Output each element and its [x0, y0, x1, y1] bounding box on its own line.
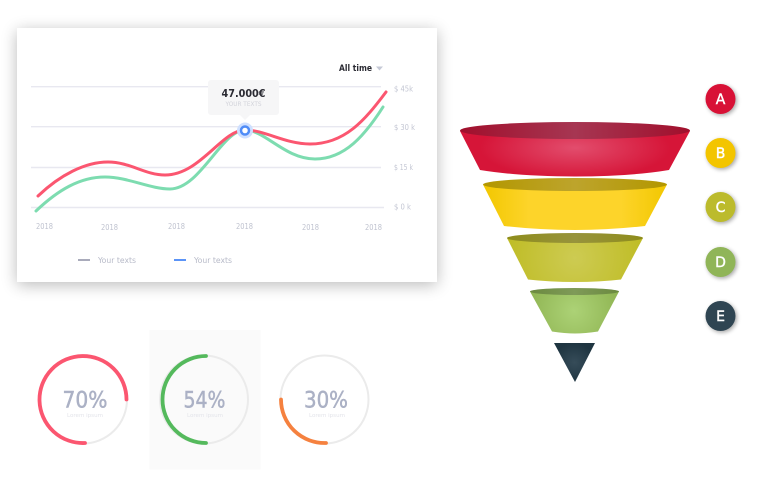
badge E: [706, 301, 737, 332]
funnel: [460, 122, 690, 382]
gauge: 30%: [280, 356, 368, 444]
gauge: 54%: Lorem ipsum: [187, 413, 223, 419]
x axis labels: 2018: [101, 223, 118, 232]
tooltip: 47.000€: [222, 88, 266, 100]
gauge: 70%: 70%: [62, 388, 108, 414]
badge E: E: [716, 309, 725, 325]
gauge: 70%: Lorem ipsum: [67, 413, 103, 419]
legend: [78, 256, 232, 265]
x axis labels: 2018: [36, 222, 53, 231]
badge A: A: [716, 92, 726, 108]
funnel tier E: dark tip: [554, 343, 595, 382]
x axis labels: 2018: [236, 222, 253, 231]
line series: red: [38, 92, 386, 196]
gauge: 30%: Lorem ipsum: [309, 413, 345, 419]
filter: all time: All time: [339, 64, 372, 74]
chart grid lines: [31, 87, 384, 208]
funnel tier D: green: [530, 288, 619, 334]
gauge: 54%: [160, 356, 248, 444]
legend: Your texts: [193, 256, 232, 265]
tooltip: YOUR TEXTS: [225, 101, 262, 108]
gauge: 30%: 30%: [304, 388, 348, 414]
badge B: B: [716, 146, 725, 162]
badge A: [706, 84, 737, 116]
y axis labels: [394, 84, 415, 212]
badge C: C: [716, 200, 726, 216]
x axis labels: 2018: [365, 223, 382, 232]
y axis labels: $ 0 k: [394, 202, 411, 212]
panel: line chart card: [17, 28, 437, 285]
badge B: [706, 138, 737, 170]
badge C: [706, 192, 737, 224]
y axis labels: $ 45k: [394, 84, 413, 94]
funnel tier A: red: [460, 122, 690, 176]
x axis labels: 2018: [168, 222, 185, 231]
gauge: 70%: [39, 356, 127, 444]
line series: green: [36, 107, 383, 211]
badge D: D: [715, 255, 726, 271]
x axis labels: 2018: [302, 223, 319, 232]
tooltip: [208, 80, 279, 120]
panel: highlighted gauge background: [150, 330, 260, 470]
legend: Your texts: [97, 256, 136, 265]
funnel tier C: olive: [507, 233, 643, 282]
gauge: 54%: 54%: [184, 388, 226, 414]
funnel tier B: yellow: [483, 178, 667, 230]
x axis labels: [36, 222, 382, 232]
data point marker: [237, 122, 253, 138]
y axis labels: $ 30 k: [394, 123, 415, 132]
y axis labels: $ 15 k: [394, 163, 413, 172]
badge D: [706, 247, 737, 278]
